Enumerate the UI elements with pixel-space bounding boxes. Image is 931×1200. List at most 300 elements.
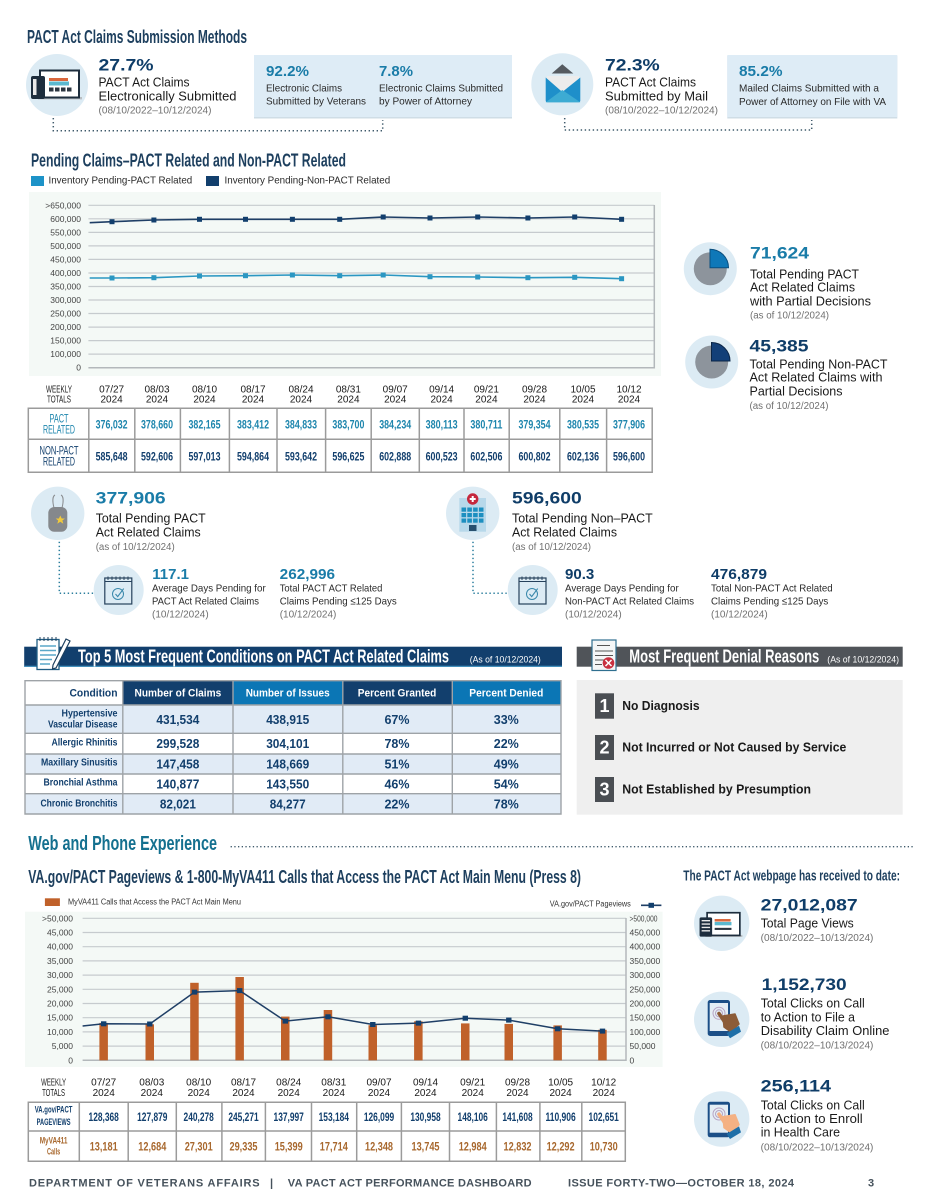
- stat: 476,879 pending 125 days: 476,879: [711, 566, 767, 583]
- line chart: pending claims: [29, 192, 661, 376]
- row: allergic rhinitis: 78%: [384, 737, 410, 751]
- column headings: 09/07: [383, 384, 408, 395]
- right axis: 150,000: [630, 1013, 660, 1023]
- column headings: [46, 384, 642, 406]
- stat: 85.2%: 85.2%: [739, 63, 782, 80]
- banner title: Most Frequent Denial Reasons: [629, 646, 819, 666]
- row: pageviews: 240,278: [184, 1110, 214, 1124]
- table header: Number of Claims: [135, 688, 221, 700]
- reason 1: 1: [599, 696, 610, 716]
- column headings: 2024: [146, 395, 169, 406]
- label: Total Pending PACT: [750, 266, 859, 281]
- label: Total Page Views: [761, 915, 854, 930]
- row: bronchial asthma: Bronchial Asthma: [44, 778, 118, 789]
- label: [512, 511, 653, 539]
- heading: PACT Act Claims Submission Methods: PACT Act Claims Submission Methods: [27, 27, 247, 47]
- column headings: 10/05: [570, 384, 596, 395]
- row: PACT related: 377,906: [613, 418, 645, 432]
- row: non-PACT related: 596,625: [332, 449, 365, 463]
- row: non-PACT related: 597,013: [188, 449, 221, 463]
- row: calls: 29,335: [230, 1139, 258, 1153]
- column headings: 2024: [278, 1088, 300, 1099]
- column headings: 09/14: [413, 1077, 438, 1088]
- stat: 262,996 pending 125 days: [280, 566, 397, 620]
- stat: 117.1 average days: PACT Act Related Claims: [152, 595, 259, 607]
- legend: calls: MyVA411 Calls that Access the PACT Act Main Menu: [68, 897, 241, 906]
- stat: 262,996 pending 125 days: Total PACT ACT Related: [280, 583, 383, 595]
- label: with Partial Decisions: [749, 293, 871, 308]
- right axis: 250,000: [630, 984, 660, 994]
- row: non-PACT related: 593,642: [285, 449, 317, 463]
- callout: mailed claims: [727, 55, 897, 118]
- stat: 476,879 pending 125 days: [711, 566, 833, 620]
- stat text: mailed POA: Power of Attorney on File with VA: [739, 96, 886, 108]
- column headings: 2024: [506, 1088, 529, 1099]
- column headings: 08/31: [336, 384, 361, 395]
- column headings: TOTALS: [42, 1088, 65, 1099]
- left axis: 30,000: [47, 970, 73, 980]
- column headings: 10/12: [616, 384, 642, 395]
- row: hypertensive vascular disease: 438,915: [266, 713, 309, 727]
- left axis: 25,000: [47, 984, 73, 994]
- column headings: 09/14: [429, 384, 455, 395]
- label: in Health Care: [761, 1124, 840, 1139]
- row: allergic rhinitis: Allergic Rhinitis: [52, 738, 118, 749]
- y axis labels: 100,000: [50, 349, 81, 359]
- stat text: mailed POA: [739, 82, 886, 108]
- column headings: 08/03: [144, 384, 170, 395]
- table header: Number of Issues: [246, 688, 330, 700]
- column headings: WEEKLY: [41, 1077, 66, 1088]
- column headings: 2024: [193, 395, 216, 406]
- date range: (08/10/2022–10/12/2024): [98, 106, 212, 117]
- icon: pie non-PACT: [685, 336, 738, 388]
- row: pageviews: 245,271: [228, 1110, 259, 1124]
- row: calls: 12,984: [459, 1139, 487, 1153]
- column headings: 08/31: [321, 1077, 347, 1088]
- row: PACT related: 379,354: [518, 418, 551, 432]
- row: non-PACT related: 602,136: [567, 449, 599, 463]
- column headings: 08/24: [276, 1077, 302, 1088]
- row: hypertensive vascular disease: 67%: [384, 713, 410, 727]
- row: PACT related: 376,032: [96, 418, 128, 432]
- row: PACT related: RELATED: [43, 422, 75, 436]
- stat text: by veterans: [266, 82, 366, 108]
- icon: computer and tablet: [694, 896, 749, 951]
- stat text: by power of attorney: by Power of Attorney: [379, 96, 473, 108]
- chart legend: [31, 174, 390, 186]
- label: [761, 996, 889, 1038]
- left axis: 40,000: [47, 942, 73, 952]
- footer: ISSUE FORTY-TWO—OCTOBER 18, 2024: [568, 1178, 795, 1190]
- row: chronic bronchitis: 82,021: [160, 798, 196, 812]
- row: PACT related: 384,833: [285, 418, 317, 432]
- date: (08/10/2022–10/13/2024): [761, 1040, 873, 1051]
- stat: 262,996 pending 125 days: 262,996: [280, 566, 335, 583]
- column headings: 09/21: [460, 1077, 486, 1088]
- right axis: 200,000: [630, 998, 660, 1008]
- row: calls: 13,181: [90, 1139, 118, 1153]
- combo chart: pageviews and calls: [25, 912, 663, 1067]
- column headings: 2024: [593, 1088, 615, 1099]
- column headings: 2024: [523, 395, 546, 406]
- right axis: 100,000: [630, 1027, 660, 1037]
- footer: DEPARTMENT OF VETERANS AFFAIRS: [29, 1178, 260, 1190]
- right axis: 350,000: [630, 956, 660, 966]
- label: Partial Decisions: [750, 383, 843, 398]
- y axis labels: 300,000: [50, 295, 81, 305]
- row: non-PACT related: 600,523: [426, 449, 458, 463]
- series: PACT related: [90, 272, 624, 281]
- right axis: [630, 913, 660, 1065]
- row: calls: 12,292: [547, 1139, 575, 1153]
- column headings: 2024: [572, 395, 595, 406]
- column headings: 09/28: [505, 1077, 530, 1088]
- row: pageviews: 137,997: [274, 1110, 304, 1124]
- column headings: 2024: [384, 395, 407, 406]
- stat: 90.3 average days: Non-PACT Act Related Claims: [565, 595, 694, 607]
- column headings: 10/05: [548, 1077, 574, 1088]
- heading: pending claims: Pending Claims–PACT Related and Non-PACT Related: [31, 151, 346, 171]
- row: hypertensive vascular disease: 33%: [494, 713, 519, 727]
- left axis: 35,000: [47, 956, 73, 966]
- y axis labels: 400,000: [50, 268, 81, 278]
- panel: electronically submitted: [26, 54, 236, 117]
- label: Act Related Claims: [750, 280, 855, 295]
- icon: computer and tablet: [26, 54, 88, 116]
- row: PACT related: PACT: [50, 412, 69, 426]
- row: chronic bronchitis: [40, 798, 519, 812]
- reason 3: Not Established by Presumption: [622, 783, 811, 797]
- row: calls: 10,730: [590, 1139, 618, 1153]
- row: calls: Calls: [47, 1147, 60, 1158]
- row: calls: 12,348: [365, 1139, 393, 1153]
- row: hypertensive vascular disease: Vascular Disease: [48, 720, 118, 731]
- date: (as of 10/12/2024): [750, 311, 829, 322]
- row: maxillary sinusitis: 147,458: [156, 758, 199, 772]
- y axis labels: 150,000: [50, 336, 81, 346]
- panel: partial decisions PACT: [684, 242, 871, 322]
- date range: (08/10/2022–10/12/2024): [605, 106, 718, 117]
- reason 2: Not Incurred or Not Caused by Service: [622, 741, 846, 755]
- icon: hospital: [446, 487, 499, 540]
- stat text: by power of attorney: [379, 82, 503, 108]
- bars: calls: [99, 977, 607, 1060]
- y axis labels: [45, 200, 81, 373]
- column headings: 2024: [368, 1088, 391, 1099]
- label: submitted by mail: Submitted by Mail: [605, 88, 708, 103]
- banner date: (As of 10/12/2024): [470, 655, 541, 666]
- reason 1: No Diagnosis: [622, 699, 700, 713]
- date: (as of 10/12/2024): [750, 401, 828, 412]
- row: chronic bronchitis: 22%: [384, 798, 410, 812]
- line: pageviews: [83, 988, 605, 1034]
- table: weekly totals pending claims: [28, 384, 652, 472]
- column headings: 08/10: [186, 1077, 212, 1088]
- column headings: [41, 1077, 617, 1099]
- left axis: 0: [68, 1055, 73, 1065]
- label: submitted by mail: [605, 74, 708, 103]
- stat text: by power of attorney: Electronic Claims Submitted: [379, 82, 503, 94]
- callout: electronic claims breakdown: [254, 55, 512, 118]
- row: pageviews: 127,879: [137, 1110, 168, 1124]
- label: Disability Claim Online: [761, 1023, 889, 1038]
- row: pageviews: 153,184: [319, 1110, 349, 1124]
- label: to Action to File a: [761, 1009, 856, 1024]
- y axis labels: >650,000: [45, 200, 81, 210]
- row: non-PACT related: 596,600: [613, 449, 645, 463]
- label: Total Pending PACT: [96, 511, 206, 526]
- row: calls: [40, 1135, 618, 1158]
- chart legend: Inventory Pending-PACT Related: [48, 174, 192, 186]
- column headings: 07/27: [91, 1077, 117, 1088]
- panel: total pending PACT: [31, 487, 206, 553]
- row: pageviews: [35, 1105, 619, 1128]
- row: calls: 12,832: [504, 1139, 532, 1153]
- row: allergic rhinitis: 304,101: [266, 737, 309, 751]
- column headings: 10/12: [591, 1077, 617, 1088]
- row: calls: 12,684: [138, 1139, 167, 1153]
- column headings: 2024: [93, 1088, 115, 1099]
- y axis labels: 500,000: [50, 241, 81, 251]
- right axis: 0: [630, 1055, 634, 1065]
- column headings: 2024: [430, 395, 453, 406]
- stat: 90.3 average days: 90.3: [565, 566, 594, 583]
- row: hypertensive vascular disease: 431,534: [156, 713, 199, 727]
- label: [96, 511, 206, 539]
- right axis: >500,000: [630, 913, 658, 923]
- table header: Percent Granted: [358, 688, 436, 700]
- banner: top 5 conditions: [24, 637, 562, 670]
- row: calls: MyVA411: [40, 1135, 68, 1146]
- y axis labels: 450,000: [50, 254, 81, 264]
- table header: Condition: [70, 688, 118, 700]
- stat: 92.2%: 92.2%: [266, 63, 309, 80]
- row: chronic bronchitis: 84,277: [270, 798, 306, 812]
- column headings: 08/10: [192, 384, 217, 395]
- heading: web and phone experience: Web and Phone Experience: [28, 833, 217, 855]
- stat: 45,385: 45,385: [750, 337, 808, 356]
- icon: calendar non-PACT: [508, 565, 558, 615]
- row: hypertensive vascular disease: Hypertensive: [62, 709, 118, 720]
- row: PACT related: 384,234: [379, 418, 411, 432]
- column headings: WEEKLY: [46, 384, 72, 395]
- row: PACT related: 382,165: [188, 418, 221, 432]
- table: top 5 conditions: [25, 681, 561, 814]
- panel: clicks disability claim: [694, 975, 889, 1051]
- row: calls: 15,399: [275, 1139, 303, 1153]
- stat: 7.8%: 7.8%: [379, 63, 413, 80]
- banner date: (As of 10/12/2024): [827, 655, 899, 666]
- stat: 117.1 average days: 117.1: [152, 566, 189, 583]
- row: chronic bronchitis: Chronic Bronchitis: [40, 798, 118, 809]
- row: non-PACT related: NON-PACT: [40, 443, 79, 457]
- label: Act Related Claims: [96, 524, 201, 539]
- y axis labels: 0: [76, 363, 81, 373]
- row: chronic bronchitis: 78%: [494, 798, 519, 812]
- row: calls: 17,714: [320, 1139, 348, 1153]
- row: bronchial asthma: [44, 778, 519, 792]
- label: Act Related Claims with: [750, 370, 882, 385]
- footer: |: [270, 1178, 273, 1190]
- column headings: 08/17: [231, 1077, 256, 1088]
- label: Act Related Claims: [512, 524, 617, 539]
- row: non-PACT related: 592,606: [141, 449, 173, 463]
- label: Total Pending Non–PACT: [512, 511, 653, 526]
- label: [761, 1097, 865, 1139]
- reason 3: [595, 777, 811, 802]
- row: non-PACT related: [40, 443, 645, 469]
- row: bronchial asthma: 46%: [384, 778, 410, 792]
- date: (08/10/2022–10/13/2024): [761, 933, 873, 944]
- left axis: 15,000: [47, 1013, 73, 1023]
- column headings: 2024: [100, 395, 123, 406]
- footer: 3: [868, 1178, 874, 1190]
- row: pageviews: 130,958: [410, 1110, 441, 1124]
- y axis labels: 350,000: [50, 282, 81, 292]
- row: pageviews: PAGEVIEWS: [37, 1117, 71, 1128]
- column headings: 09/28: [522, 384, 547, 395]
- row: non-PACT related: 585,648: [96, 449, 128, 463]
- row: pageviews: 148,106: [458, 1110, 488, 1124]
- row: hypertensive vascular disease: [48, 709, 519, 731]
- label: Total Clicks on Call: [761, 996, 865, 1011]
- footer: VA PACT ACT PERFORMANCE DASHBOARD: [288, 1178, 532, 1190]
- left axis: >50,000: [42, 913, 73, 923]
- row: PACT related: [43, 412, 645, 436]
- stat: 27.7%: 27.7%: [98, 56, 154, 75]
- row: allergic rhinitis: [52, 737, 519, 751]
- label: to Action to Enroll: [761, 1111, 863, 1126]
- stat: 1,152,730: 1,152,730: [762, 975, 847, 994]
- date: (08/10/2022–10/13/2024): [761, 1143, 873, 1154]
- label: submitted by mail: PACT Act Claims: [605, 74, 696, 90]
- date: (as of 10/12/2024): [96, 542, 175, 553]
- column headings: 2024: [232, 1088, 255, 1099]
- icon: hand on tablet: [694, 992, 749, 1047]
- icon: pie PACT: [684, 242, 737, 295]
- panel: partial decisions non-PACT: [685, 336, 888, 412]
- stat text: mailed POA: Mailed Claims Submitted with a: [739, 82, 879, 94]
- panel: total pending non-PACT: [446, 487, 653, 553]
- y axis labels: 200,000: [50, 322, 81, 332]
- right axis: 450,000: [630, 928, 660, 938]
- column headings: 2024: [323, 1088, 345, 1099]
- row: non-PACT related: 602,506: [470, 449, 503, 463]
- stat: 27,012,087: 27,012,087: [761, 895, 858, 914]
- banner: denial reasons: [577, 640, 903, 670]
- banner title: Top 5 Most Frequent Conditions on PACT Act Related Claims: [78, 646, 449, 666]
- stat: 90.3 average days: (10/12/2024): [565, 609, 622, 620]
- stat: 256,114: 256,114: [761, 1077, 832, 1096]
- row: maxillary sinusitis: 148,669: [266, 758, 309, 772]
- right axis: 50,000: [630, 1041, 656, 1051]
- row: PACT related: 378,660: [141, 418, 173, 432]
- stat: 117.1 average days: [152, 566, 266, 620]
- stat: 476,879 pending 125 days: Claims Pending ≤125 Days: [711, 595, 828, 607]
- row: pageviews: 128,368: [89, 1110, 119, 1124]
- column headings: 2024: [290, 395, 313, 406]
- left axis: [42, 913, 73, 1065]
- reason 1: [595, 693, 700, 719]
- icon: notepad and pencil: [37, 637, 70, 670]
- row: pageviews: 102,651: [589, 1110, 619, 1124]
- stat: 72.3%: 72.3%: [605, 56, 660, 75]
- row: PACT related: 383,700: [332, 418, 365, 432]
- panel: total page views: [694, 895, 873, 951]
- stat: 90.3 average days: Average Days Pending for: [565, 583, 679, 595]
- stat text: by veterans: Electronic Claims: [266, 82, 342, 94]
- series: non-PACT related: [90, 214, 624, 224]
- row: bronchial asthma: 54%: [494, 778, 519, 792]
- column headings: 2024: [188, 1088, 210, 1099]
- stat: 71,624: 71,624: [750, 243, 810, 262]
- column headings: 2024: [337, 395, 360, 406]
- row: maxillary sinusitis: 49%: [494, 758, 519, 772]
- column headings: 2024: [462, 1088, 484, 1099]
- stat: 117.1 average days: (10/12/2024): [152, 609, 209, 620]
- column headings: 2024: [141, 1088, 163, 1099]
- row: maxillary sinusitis: 51%: [384, 758, 410, 772]
- stat: 262,996 pending 125 days: (10/12/2024): [280, 609, 336, 620]
- icon: envelope: [531, 53, 593, 115]
- row: non-PACT related: 594,864: [237, 449, 269, 463]
- icon: calendar PACT: [94, 565, 144, 615]
- row: PACT related: 380,113: [426, 418, 458, 432]
- chart legend: Inventory Pending-Non-PACT Related: [224, 174, 390, 186]
- label: Total Pending Non-PACT: [750, 356, 888, 371]
- row: calls: 13,745: [412, 1139, 440, 1153]
- column headings: 2024: [549, 1088, 572, 1099]
- column headings: 08/03: [139, 1077, 165, 1088]
- stat: 596,600: 596,600: [512, 488, 582, 507]
- column headings: 09/07: [366, 1077, 392, 1088]
- icon: dog tag: [31, 487, 84, 540]
- table: weekly pageviews and calls: [28, 1077, 625, 1161]
- stat: 476,879 pending 125 days: Total Non-PACT Act Related: [711, 583, 833, 595]
- column headings: 09/21: [474, 384, 499, 395]
- right axis: 400,000: [630, 942, 660, 952]
- label: Total Clicks on Call: [761, 1097, 865, 1112]
- right axis: 300,000: [630, 970, 660, 980]
- stat: 262,996 pending 125 days: Claims Pending ≤125 Days: [280, 595, 397, 607]
- left axis: 10,000: [47, 1027, 73, 1037]
- column headings: 2024: [475, 395, 498, 406]
- column headings: 07/27: [99, 384, 125, 395]
- column headings: 2024: [414, 1088, 437, 1099]
- label: electronically submitted: PACT Act Claims: [98, 75, 190, 90]
- panel: clicks health care: [694, 1077, 873, 1154]
- column headings: 2024: [618, 395, 641, 406]
- table header: [70, 688, 543, 700]
- y axis labels: 550,000: [50, 227, 81, 237]
- panel: submitted by mail: [531, 53, 718, 117]
- icon: hand on tablet: [694, 1091, 749, 1147]
- stat text: by veterans: Submitted by Veterans: [266, 96, 366, 108]
- column headings: 2024: [242, 395, 265, 406]
- reason 2: 2: [599, 738, 610, 758]
- footer: [29, 1178, 874, 1190]
- legend: pageviews: VA.gov/PACT Pageviews: [550, 900, 631, 909]
- row: bronchial asthma: 143,550: [266, 778, 309, 792]
- column headings: TOTALS: [47, 395, 71, 406]
- reason 2: [595, 735, 846, 760]
- left axis: 5,000: [52, 1041, 73, 1051]
- row: calls: 27,301: [185, 1139, 213, 1153]
- row: non-PACT related: 602,888: [379, 449, 411, 463]
- stat: 476,879 pending 125 days: (10/12/2024): [711, 609, 768, 620]
- row: allergic rhinitis: 299,528: [156, 737, 199, 751]
